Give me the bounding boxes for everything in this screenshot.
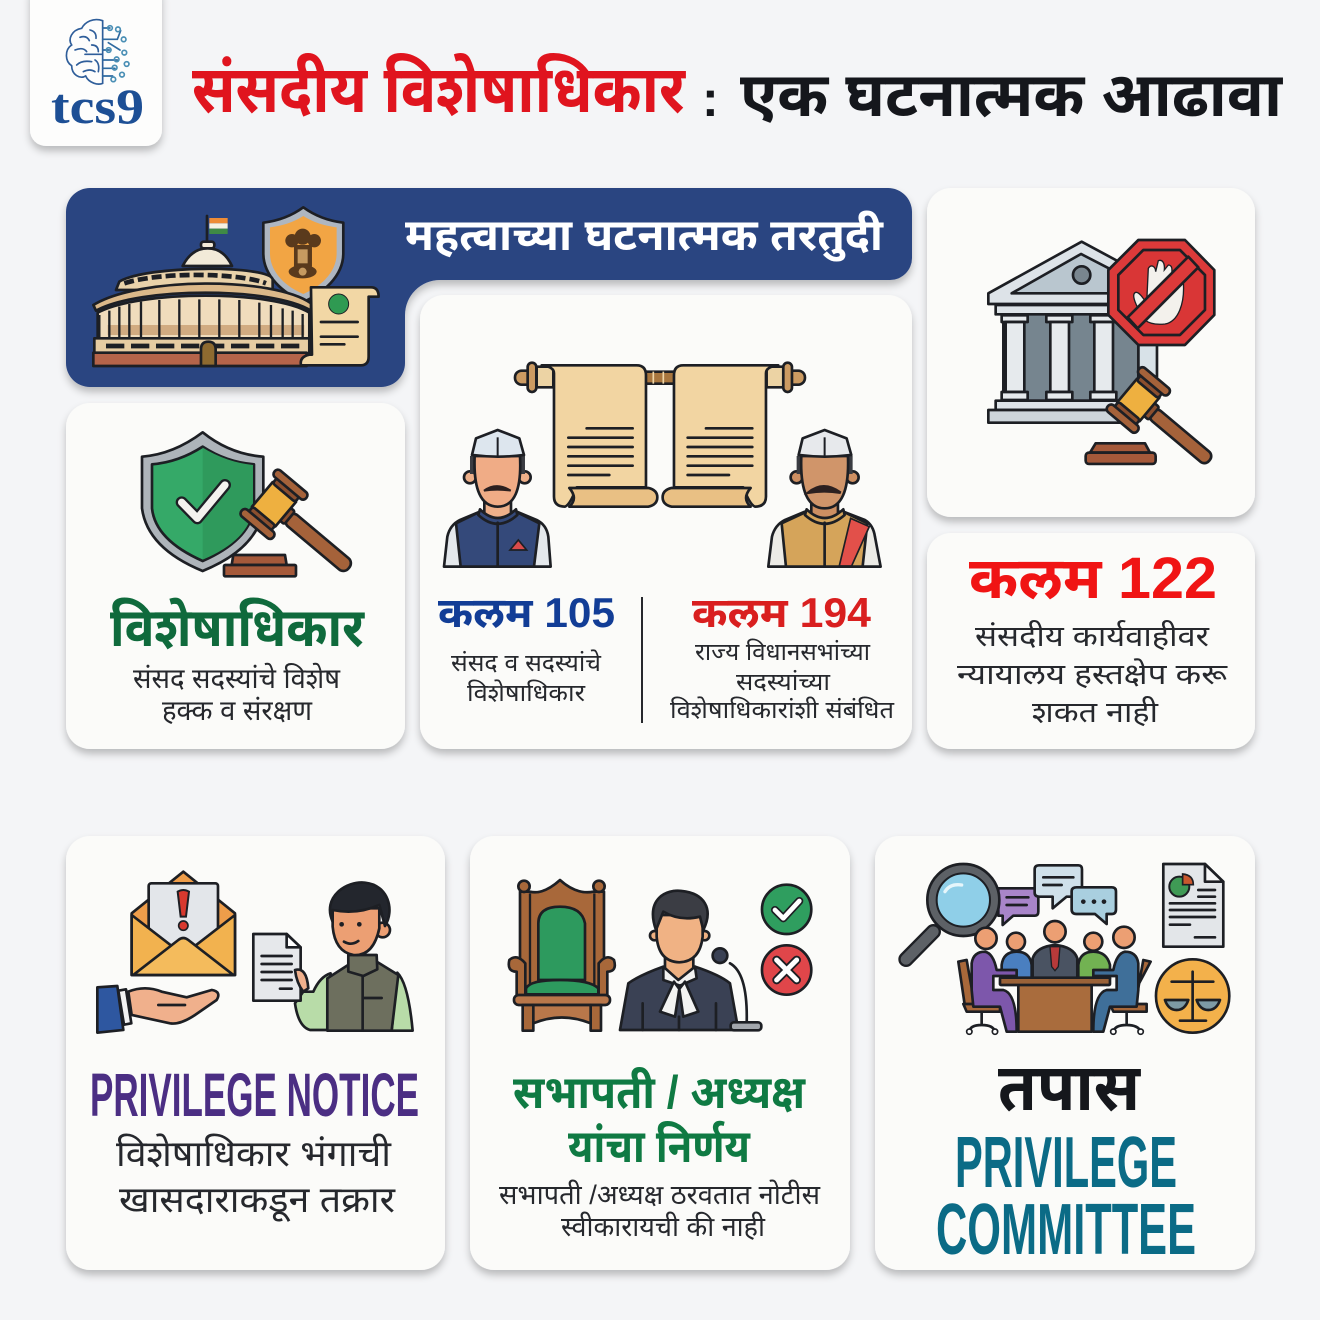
panel: speaker decision	[470, 836, 850, 1270]
logo wordmark: tcs9	[51, 78, 144, 134]
panel: privilege: हक्क व संरक्षण	[162, 695, 313, 726]
title part: red: संसदीय विशेषाधिकार	[192, 52, 687, 126]
heading: विशेषाधिकार	[110, 597, 365, 658]
panel: privilege notice: खासदाराकडून तक्रार	[119, 1179, 396, 1222]
panel: banner	[66, 188, 912, 387]
heading: सभापती / अध्यक्ष	[513, 1066, 806, 1118]
panel: article 122: शकत नाही	[1032, 696, 1159, 729]
member right	[768, 430, 881, 567]
member left	[444, 430, 551, 567]
article 194	[670, 589, 895, 724]
panel: speaker decision: यांचा निर्णय	[568, 1120, 751, 1172]
title part: black: एक घटनात्मक आढावा	[740, 61, 1284, 130]
icon: chair, speaker, tick and cross	[509, 880, 811, 1031]
icon: circuit brain	[66, 20, 129, 84]
icon: parliament, shield and scroll	[93, 207, 379, 366]
article 194: विशेषाधिकारांशी संबंधित	[670, 696, 895, 724]
article 122 description: संसदीय कार्यवाहीवर	[975, 620, 1210, 653]
panel: article 122: न्यायालय हस्तक्षेप करू	[957, 658, 1228, 691]
article 105: विशेषाधिकार	[467, 679, 586, 707]
icon: shield with gavel	[142, 432, 369, 591]
article 122 heading: कलम 122	[969, 546, 1217, 611]
title	[192, 52, 1284, 130]
heading: PRIVILEGE NOTICE	[90, 1061, 419, 1129]
article 105: संसद व सदस्यांचे	[451, 649, 602, 677]
panel: privilege	[66, 403, 405, 749]
description: सभापती /अध्यक्ष ठरवतात नोटीस	[499, 1180, 821, 1210]
banner heading: महत्वाच्या घटनात्मक तरतुदी	[405, 210, 884, 262]
icon: court building with stop hand and gavel	[988, 240, 1228, 482]
panel: privilege notice	[66, 836, 445, 1270]
description: संसद सदस्यांचे विशेष	[133, 662, 341, 694]
article 194: सदस्यांच्या	[736, 669, 831, 696]
panel: article 122	[927, 533, 1255, 749]
icon: notice envelope, hand and member	[97, 872, 413, 1033]
panel: investigation committee	[875, 836, 1255, 1270]
article 194: कलम 194	[692, 589, 872, 636]
logo: tcs9	[30, 0, 162, 146]
article 194: राज्य विधानसभांच्या	[695, 638, 871, 666]
description: विशेषाधिकार भंगाची	[116, 1133, 392, 1174]
title colon: :	[702, 71, 719, 127]
article 105: कलम 105	[438, 589, 615, 636]
article 105	[438, 589, 615, 707]
icon: committee meeting, magnifier, document and scales	[906, 864, 1229, 1034]
panel: articles 105 and 194	[420, 295, 912, 749]
heading: tapas: तपास	[998, 1050, 1141, 1124]
icon: constitution scrolls and two members	[444, 363, 881, 567]
panel: top right illustration	[927, 188, 1255, 517]
panel: speaker decision: स्वीकारायची की नाही	[561, 1211, 766, 1242]
